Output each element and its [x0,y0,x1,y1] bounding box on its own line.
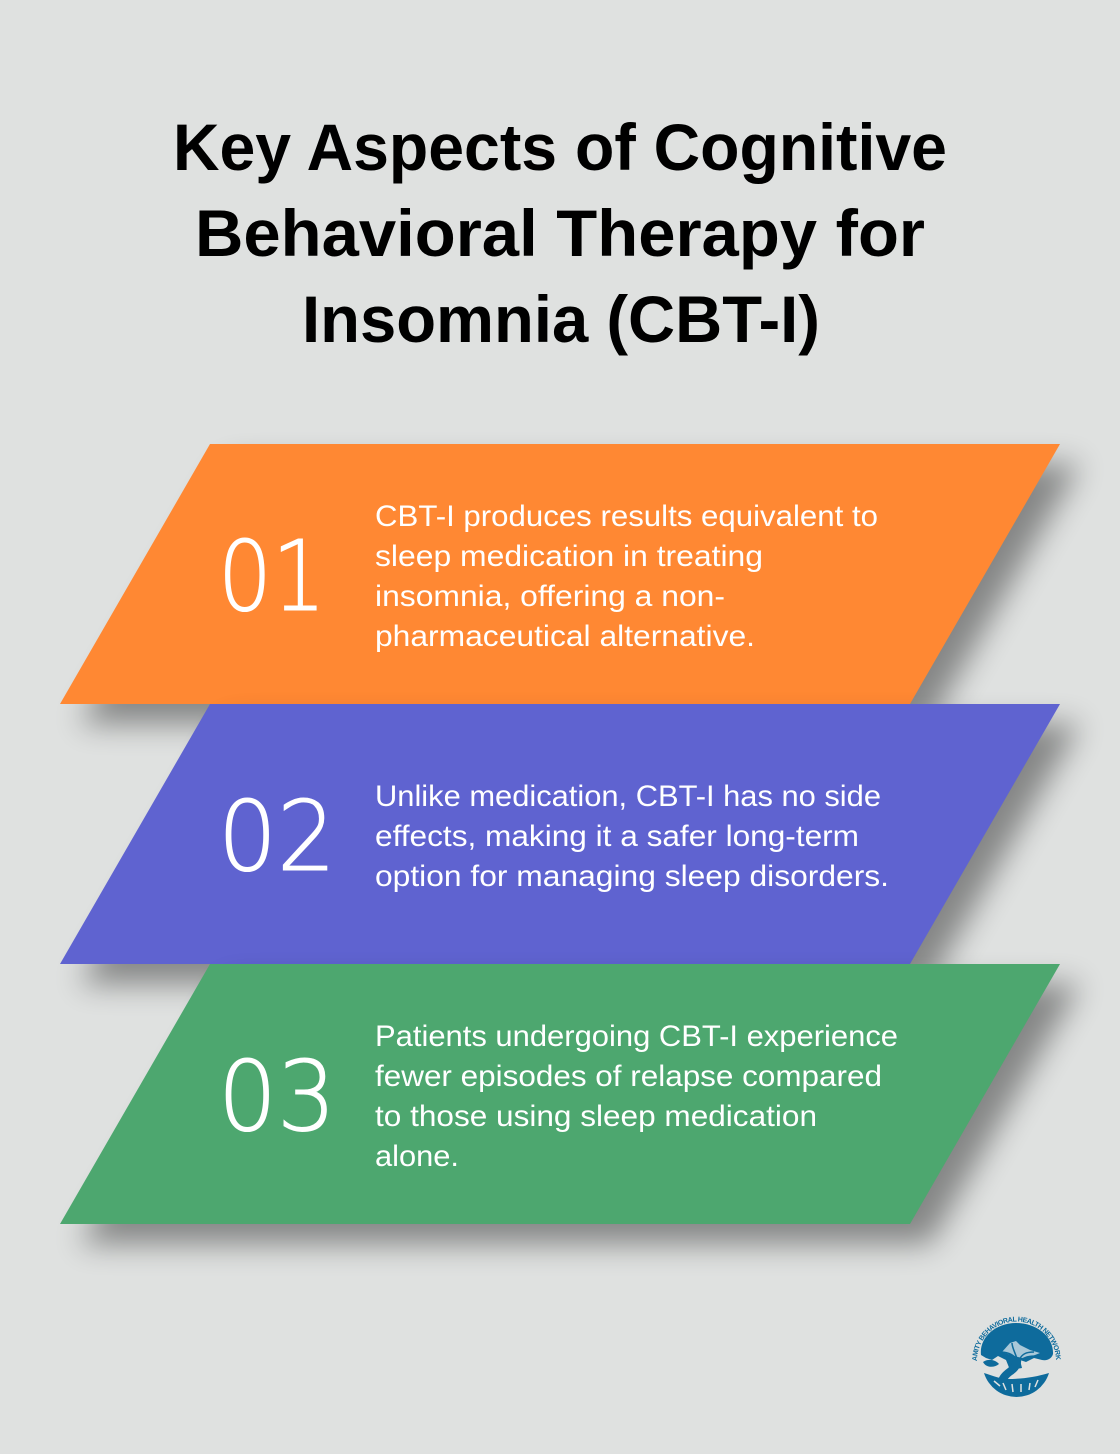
text: step 02: option for managing sleep disorders. [375,860,889,893]
icon: roots bowl [984,1373,1049,1397]
text: step 02: effects, making it a safer long-term [375,820,859,853]
text: step 01: insomnia, offering a non- [375,580,725,613]
text: step 03 [375,1020,898,1173]
title [173,110,947,356]
text: step 02: Unlike medication, CBT-I has no side [375,780,881,813]
title: Behavioral Therapy for [195,196,925,270]
text: step 01 [375,500,878,653]
text: step 01: sleep medication in treating [375,540,763,573]
icon: tree crown [981,1323,1053,1370]
text: step 02 [375,780,889,893]
text: step 01: CBT-I produces results equivalent to [375,500,878,533]
panel: step 02 [60,704,1080,984]
number 01: 01 [218,520,326,633]
panel: step 01 [60,444,1080,724]
panel: step 03 [60,964,1080,1244]
icon: tree trunk [998,1358,1021,1384]
logo: Amity Behavioral Health Network [972,1316,1061,1397]
logo: Amity Behavioral Health Network: AMITY BEHAVIORAL HEALTH NETWORK [972,1316,1061,1361]
title: Insomnia (CBT-I) [302,282,820,356]
icon: left foliage [983,1360,999,1367]
number 03: 03 [218,1040,336,1153]
text: step 03: Patients undergoing CBT-I experience [375,1020,898,1053]
icon: crown highlights [1002,1341,1040,1358]
icon: tree branches [1000,1343,1040,1362]
title: Key Aspects of Cognitive [173,110,947,184]
text: step 03: to those using sleep medication [375,1100,817,1133]
number 02: 02 [218,780,336,893]
text: step 01: pharmaceutical alternative. [375,620,755,653]
text: step 03: alone. [375,1140,459,1173]
text: step 03: fewer episodes of relapse compared [375,1060,882,1093]
